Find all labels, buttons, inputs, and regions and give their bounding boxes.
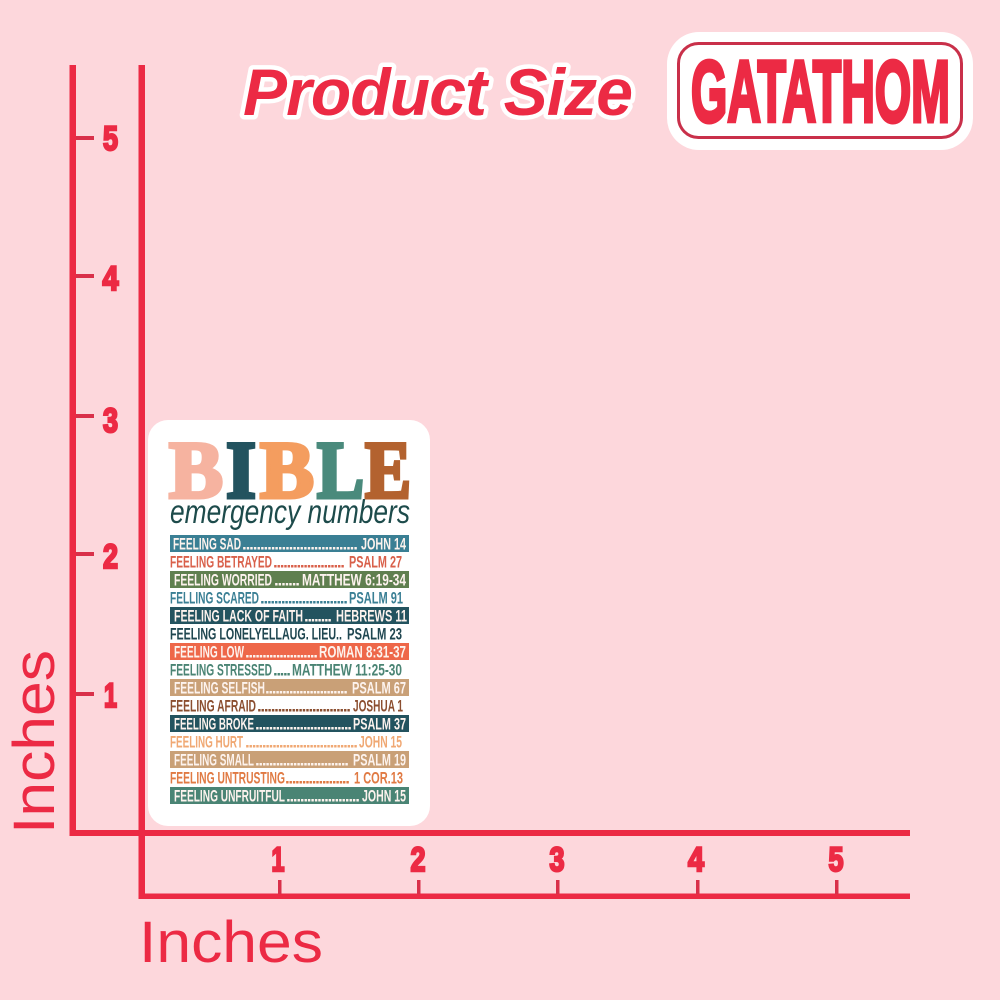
row: feeling hurt [170,732,402,752]
row: feeling lonely: PSALM 23 [347,624,402,644]
row: feeling worried [170,570,409,590]
heading: BIBLE: B [169,424,223,516]
row: feeling selfish: PSALM 67 [352,678,406,698]
row: feeling unfruitful: JOHN 15 [362,786,406,806]
row: felling scared: FELLING SCARED [170,588,259,608]
horizontal ruler: 5 [828,841,844,879]
row: feeling lonely: FEELING LONELYELLAUG. LIEU.. [170,624,342,644]
row: feeling selfish: FEELING SELFISH [174,678,265,698]
row: feeling stressed: FEELING STRESSED [170,660,272,680]
horizontal ruler: 3 [550,841,564,879]
row: feeling low [170,642,409,662]
row: feeling small [170,750,409,770]
row: feeling lack of faith: FEELING LACK OF FAITH [174,606,303,626]
row: feeling low: ROMAN 8:31-37 [319,642,406,662]
heading: BIBLE: L [317,424,364,516]
row: felling scared: PSALM 91 [349,588,403,608]
row: feeling unfruitful: FEELING UNFRUITFUL [174,786,285,806]
row: feeling broke: ............................ [255,714,352,734]
heading: BIBLE: E [365,424,411,516]
heading: BIBLE [169,424,411,516]
vertical ruler: 3 [103,402,118,440]
row: feeling small: FEELING SMALL [174,750,254,770]
row: feeling sad: JOHN 14 [361,534,406,554]
row: feeling hurt: FEELING HURT [170,732,243,752]
row: feeling worried: FEELING WORRIED [174,570,272,590]
axis label: Inches vertical: Inches [2,650,67,834]
row: felling scared [170,588,403,608]
row: feeling worried: MATTHEW 6:19-34 [302,570,406,590]
row: feeling unfruitful: ..................... [286,786,360,806]
row: feeling worried: ....... [274,570,300,590]
row: feeling lack of faith: ........ [304,606,332,626]
sticker: Bible emergency numbers [148,420,430,826]
vertical ruler [70,65,145,899]
row: feeling betrayed: FEELING BETRAYED [170,552,272,572]
vertical ruler: 1 [104,677,117,715]
subheading: emergency numbers: emergency numbers [170,493,410,530]
row: feeling stressed: ..... [273,660,291,680]
title: Product Size: Product Size [243,55,633,129]
heading: BIBLE: B [260,424,314,516]
row: feeling untrusting: 1 COR.13 [354,768,403,788]
row: feeling low: FEELING LOW [174,642,245,662]
row: feeling betrayed: PSALM 27 [349,552,402,572]
row: feeling sad: ................................ [242,534,358,554]
row: feeling betrayed: ..................... [273,552,345,572]
row: feeling hurt: ................................. [245,732,358,752]
row: feeling broke: FEELING BROKE [174,714,254,734]
row: feeling broke: PSALM 37 [353,714,406,734]
row: feeling broke [170,714,409,734]
vertical ruler: 2 [103,538,118,576]
row: feeling untrusting: FEELING UNTRUSTING [170,768,285,788]
row: felling scared: ......................... [260,588,348,608]
vertical ruler: 5 [103,120,118,158]
row: feeling low: ..................... [245,642,318,662]
row: feeling afraid: JOSHUA 1 [353,696,403,716]
row: feeling afraid: FEELING AFRAID [170,696,256,716]
row: feeling stressed: MATTHEW 11:25-30 [292,660,402,680]
row: feeling afraid [170,696,403,716]
row: feeling small: ........................... [255,750,349,770]
vertical ruler: 4 [102,260,119,298]
row: feeling untrusting: ................... [285,768,350,788]
horizontal ruler: 2 [410,841,426,879]
horizontal ruler: 1 [272,841,284,879]
horizontal ruler: 4 [688,841,704,879]
row: feeling sad: FEELING SAD [173,534,241,554]
row: feeling lack of faith: HEBREWS 11 [336,606,407,626]
horizontal ruler [70,830,910,899]
row: feeling sad [170,534,409,554]
row: feeling selfish [170,678,409,698]
row: feeling afraid: ........................... [257,696,351,716]
heading: BIBLE: I [226,424,256,516]
row: feeling selfish: ........................ [265,678,348,698]
row: feeling hurt: JOHN 15 [359,732,402,752]
axis label: Inches horizontal: Inches [139,910,323,975]
title: Product Size: Product Size [243,55,633,129]
row: feeling small: PSALM 19 [353,750,406,770]
